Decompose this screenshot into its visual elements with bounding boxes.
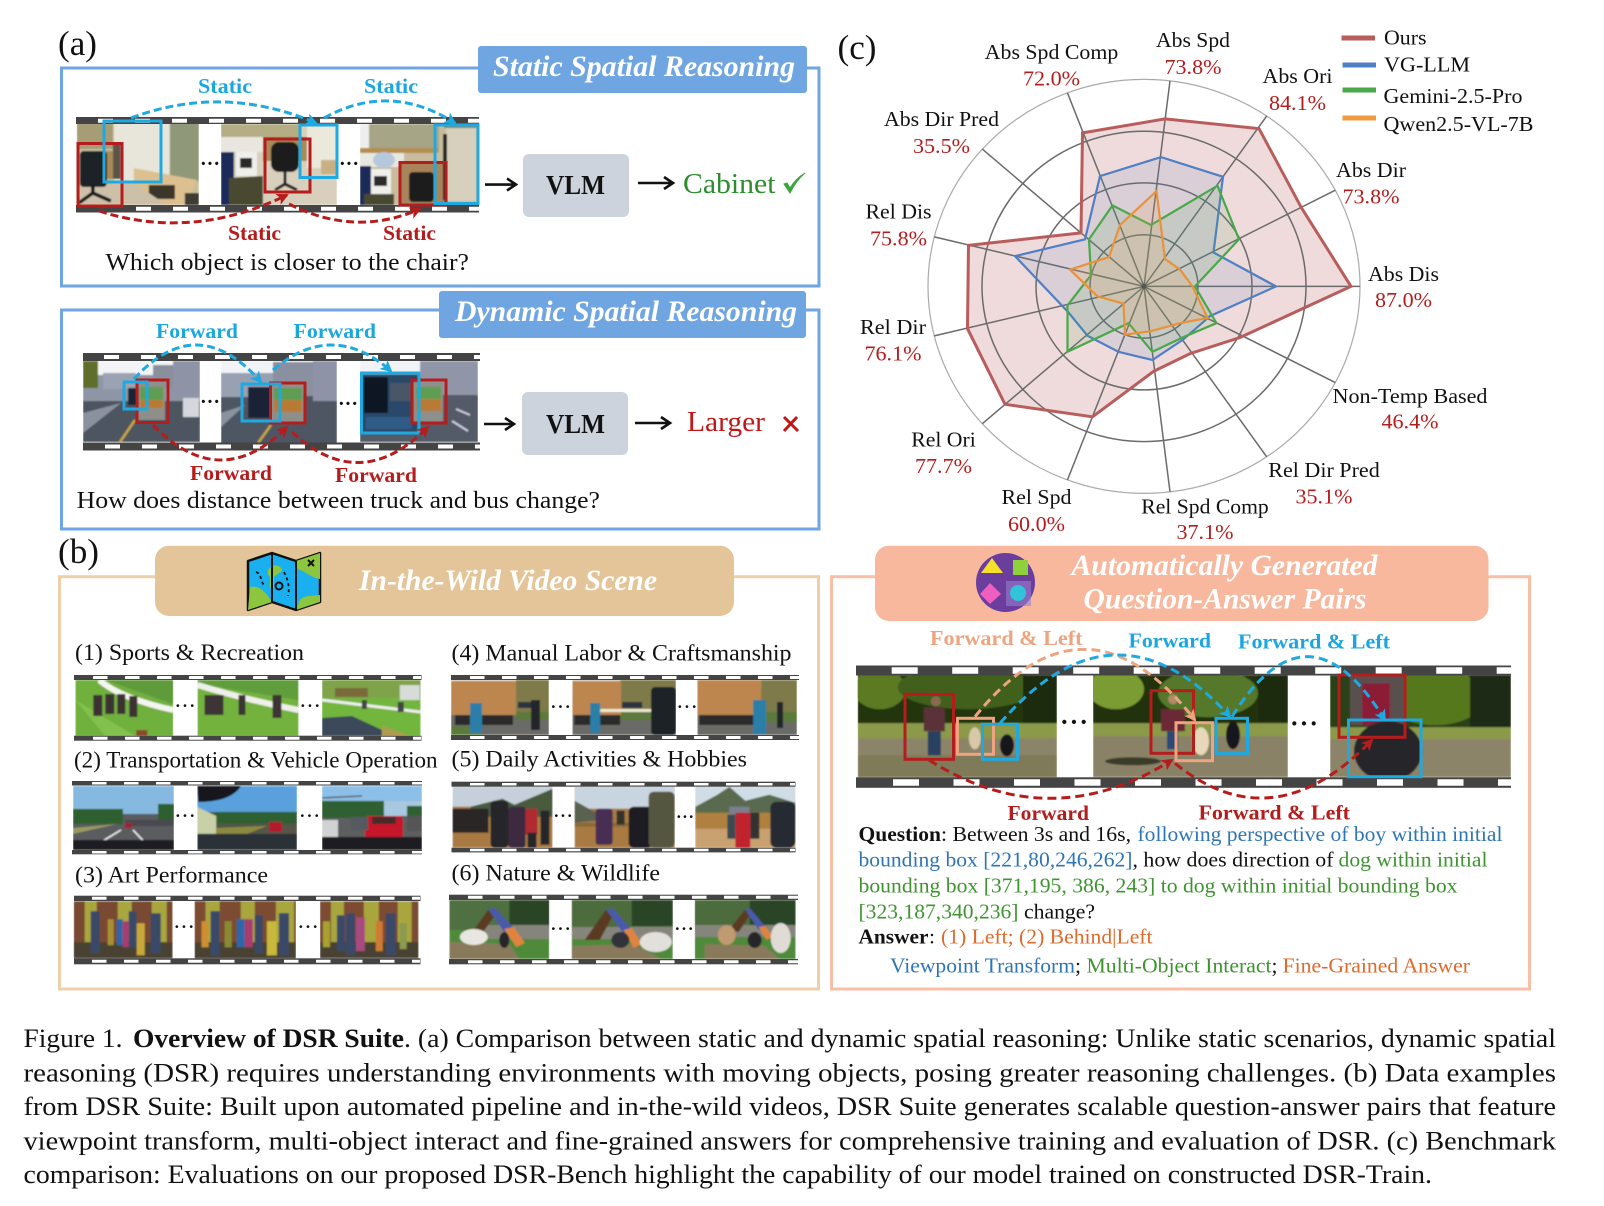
figure caption: from DSR Suite: Built upon automated pipeline and in-the-wild videos, DSR Suite generates scalable question-answer pairs that feature: [24, 1092, 1556, 1121]
motion labels: static: Static: [364, 74, 418, 98]
motion labels: boy and dogs: Forward & Left: [1238, 629, 1391, 653]
item 1: sports & recreation: [74, 640, 422, 741]
item 3: art performance: [74, 863, 420, 965]
item 2: transportation & vehicle operation: (2) Transportation & Vehicle Operation: [74, 747, 438, 773]
item 3: art performance: (3) Art Performance: [75, 863, 268, 889]
answer text: (1) Left; (2) Behind|Left: [941, 924, 1153, 948]
question text: bounding box [371,195, 386, 243] to dog within initial bounding box: [858, 874, 1458, 898]
motion labels: boy and dogs: Forward & Left: [930, 626, 1083, 650]
ellipsis dots: [550, 919, 694, 938]
ellipsis dots: [550, 697, 697, 716]
question text: Question: [858, 822, 941, 846]
legend: [1342, 26, 1534, 136]
arrow: VLM to answer: [638, 177, 673, 189]
arcs: dynamic: [134, 345, 428, 463]
radar axis labels: 73.8%: [1342, 184, 1400, 208]
question text: : Between 3s and 16s,: [941, 822, 1131, 846]
label (a): (a): [58, 24, 97, 63]
question: static: Which object is closer to the chair?: [106, 249, 469, 276]
radar axis labels: 87.0%: [1375, 288, 1432, 312]
radar axis labels: 35.1%: [1296, 485, 1353, 509]
motion labels: boy and dogs: Forward & Left: [1198, 800, 1351, 824]
radar axis labels: [860, 28, 1488, 544]
ellipsis dots: · · ·: [200, 153, 220, 175]
radar axis labels: Non-Temp Based: [1332, 384, 1488, 408]
heading: static spatial reasoning: [478, 46, 807, 93]
item 5: daily activities & hobbies: (5) Daily Activities & Hobbies: [452, 747, 747, 773]
panel: in-the-wild video scene: [60, 546, 818, 989]
radar axis labels: Abs Spd Comp: [985, 40, 1118, 64]
legend: VG-LLM: [1384, 52, 1470, 76]
item 4: manual labor & craftsmanship: (4) Manual Labor & Craftsmanship: [452, 641, 792, 667]
ellipsis dots: · · ·: [300, 806, 320, 825]
ellipsis dots: [1060, 708, 1318, 738]
feature tags: ;: [1272, 953, 1277, 977]
ellipsis dots: [175, 696, 320, 715]
feature tags: [890, 953, 1470, 977]
answer: cabinet: Cabinet: [683, 168, 776, 200]
arrow: film to VLM: [485, 178, 516, 190]
motion labels: static: [198, 74, 436, 245]
arcs: boy and dogs: [929, 649, 1385, 798]
icon: shapes in purple circle: [976, 553, 1035, 612]
question text: [858, 822, 1503, 923]
ellipsis dots: · · ·: [1290, 709, 1318, 738]
radar axis labels: 75.8%: [870, 227, 927, 251]
answer: larger: Larger: [687, 406, 765, 438]
motion labels: dynamic: Forward: [190, 461, 272, 485]
question text: change?: [1024, 899, 1095, 923]
item 6: nature & wildlife: [449, 861, 798, 964]
icon: treasure map: [248, 553, 320, 610]
film strip: boy and dogs: [854, 665, 1511, 788]
figure caption: comparison: Evaluations on our proposed DSR-Bench highlight the capability of our model trained on constructed DSR-Train.: [24, 1160, 1432, 1189]
ellipsis dots: · · ·: [175, 696, 195, 715]
ellipsis dots: · · ·: [554, 806, 572, 825]
heading: automatically generated question-answer pairs: [875, 546, 1488, 621]
question text: dog within initial: [1338, 848, 1488, 872]
radar axis labels: Rel Dir Pred: [1268, 458, 1380, 482]
figure caption: [24, 1024, 1556, 1189]
ellipsis dots: · · ·: [338, 393, 358, 415]
radar axis labels: 60.0%: [1008, 512, 1065, 536]
question text: following perspective of boy within initial: [1138, 822, 1503, 846]
radar axis labels: Rel Spd: [1002, 485, 1072, 509]
heading: dynamic spatial reasoning: [439, 291, 806, 338]
item 1: sports & recreation: (1) Sports & Recreation: [75, 640, 304, 666]
heading: dynamic spatial reasoning: Dynamic Spatial Reasoning: [454, 296, 797, 328]
ellipsis dots: · · ·: [300, 696, 320, 715]
radar axis labels: 84.1%: [1269, 91, 1326, 115]
VLM box: [522, 392, 628, 455]
answer text: Answer: [858, 924, 929, 948]
item 6: nature & wildlife: (6) Nature & Wildlife: [452, 861, 660, 887]
motion labels: boy and dogs: [930, 626, 1391, 825]
radar axis labels: Abs Dis: [1368, 262, 1439, 286]
motion labels: static: Static: [228, 221, 281, 245]
ellipsis dots: · · ·: [174, 917, 194, 936]
film strip: indoor scene: [76, 117, 479, 212]
radar axis labels: Abs Dir: [1336, 158, 1406, 182]
answer text: :: [929, 924, 935, 948]
figure caption: Overview of DSR Suite: [133, 1024, 404, 1053]
label (c): (c): [838, 28, 876, 67]
panel: static spatial reasoning: [62, 46, 819, 286]
ellipsis dots: · · ·: [298, 917, 318, 936]
heading: automatically generated question-answer pairs: Automatically Generated: [1069, 550, 1379, 582]
feature tags: Fine-Grained Answer: [1282, 953, 1470, 977]
radar axis labels: Abs Dir Pred: [884, 107, 999, 131]
ellipsis dots: · · ·: [676, 807, 694, 826]
motion labels: dynamic: Forward: [335, 463, 417, 487]
item 4: manual labor & craftsmanship: [451, 641, 799, 740]
motion labels: boy and dogs: Forward: [1008, 801, 1089, 825]
heading: in-the-wild video scene: [155, 546, 734, 616]
ellipsis dots: · · ·: [1060, 708, 1088, 736]
ellipsis dots: · · ·: [200, 391, 220, 413]
feature tags: Multi-Object Interact: [1086, 953, 1272, 977]
ellipsis dots: · · ·: [175, 806, 195, 825]
ellipsis dots: [175, 806, 320, 825]
figure caption: . (a) Comparison between static and dynamic spatial reasoning: Unlike static scenarios, dynamic spatial: [404, 1024, 1556, 1053]
panel: dynamic spatial reasoning: [62, 291, 819, 529]
figure caption: Figure 1.: [24, 1024, 122, 1053]
question text: bounding box [221,80,246,262]: [858, 848, 1132, 872]
heading: static spatial reasoning: Static Spatial Reasoning: [493, 51, 795, 83]
question text: , how does direction of: [1132, 848, 1334, 872]
answer: larger: [687, 406, 798, 438]
arrow: film to VLM: [484, 418, 514, 430]
VLM box: VLM: [546, 170, 605, 200]
radar axis labels: 37.1%: [1176, 520, 1234, 544]
motion labels: boy and dogs: Forward: [1128, 628, 1211, 652]
figure caption: viewpoint transform, multi-object interact and fine-grained answers for comprehensive training and evaluation of DSR. (c) Benchmark: [24, 1126, 1556, 1155]
motion labels: dynamic: [156, 319, 417, 487]
question text: [323,187,340,236]: [858, 899, 1018, 923]
heading: in-the-wild video scene: In-the-Wild Video Scene: [358, 565, 657, 597]
radar axis labels: Rel Dis: [866, 200, 932, 224]
ellipsis dots: · · ·: [677, 697, 697, 716]
radar axis labels: 77.7%: [915, 454, 972, 478]
ellipsis dots: [174, 917, 318, 936]
radar axis labels: Abs Ori: [1262, 64, 1333, 88]
radar axis labels: 46.4%: [1382, 410, 1439, 434]
VLM box: [523, 154, 629, 217]
feature tags: Viewpoint Transform: [890, 953, 1075, 977]
motion labels: static: Static: [383, 221, 436, 245]
motion labels: dynamic: Forward: [294, 319, 376, 343]
legend: Ours: [1384, 26, 1426, 50]
item 5: daily activities & hobbies: [452, 747, 796, 853]
ellipsis dots: [200, 153, 359, 175]
ellipsis dots: · · ·: [674, 919, 694, 938]
item 2: transportation & vehicle operation: [72, 747, 438, 854]
radar axis labels: Rel Ori: [911, 427, 976, 451]
radar axis labels: Rel Spd Comp: [1141, 495, 1269, 519]
heading: automatically generated question-answer pairs: Question-Answer Pairs: [1084, 583, 1366, 615]
feature tags: ;: [1075, 953, 1081, 977]
ellipsis dots: · · ·: [339, 153, 359, 175]
ellipsis dots: · · ·: [550, 919, 570, 938]
radar axis labels: 35.5%: [913, 134, 970, 158]
motion labels: dynamic: Forward: [156, 319, 238, 343]
label (b): (b): [58, 532, 99, 571]
figure caption: reasoning (DSR) requires understanding environments with moving objects, posing greater reasoning challenges. (b) Data examples: [24, 1059, 1556, 1088]
VLM box: VLM: [546, 409, 605, 439]
arcs: static: [99, 101, 455, 223]
ellipsis dots: [554, 806, 694, 826]
radar axis labels: 73.8%: [1164, 55, 1222, 79]
motion labels: static: Static: [198, 74, 252, 98]
film strip: street scene: [83, 353, 480, 451]
legend: Qwen2.5-VL-7B: [1384, 112, 1534, 136]
radar axis labels: Abs Spd: [1156, 28, 1230, 52]
radar axis labels: Rel Dir: [860, 315, 926, 339]
legend: Gemini-2.5-Pro: [1384, 84, 1522, 108]
arrow: VLM to answer: [635, 417, 670, 429]
radar axis labels: 76.1%: [864, 342, 922, 366]
question: dynamic: How does distance between truck and bus change?: [77, 487, 600, 514]
radar chart: [928, 79, 1360, 493]
radar axis labels: 72.0%: [1023, 67, 1080, 91]
ellipsis dots: · · ·: [550, 697, 570, 716]
ellipsis dots: [200, 391, 358, 415]
panel: automatically generated question-answer pairs: [832, 546, 1530, 989]
